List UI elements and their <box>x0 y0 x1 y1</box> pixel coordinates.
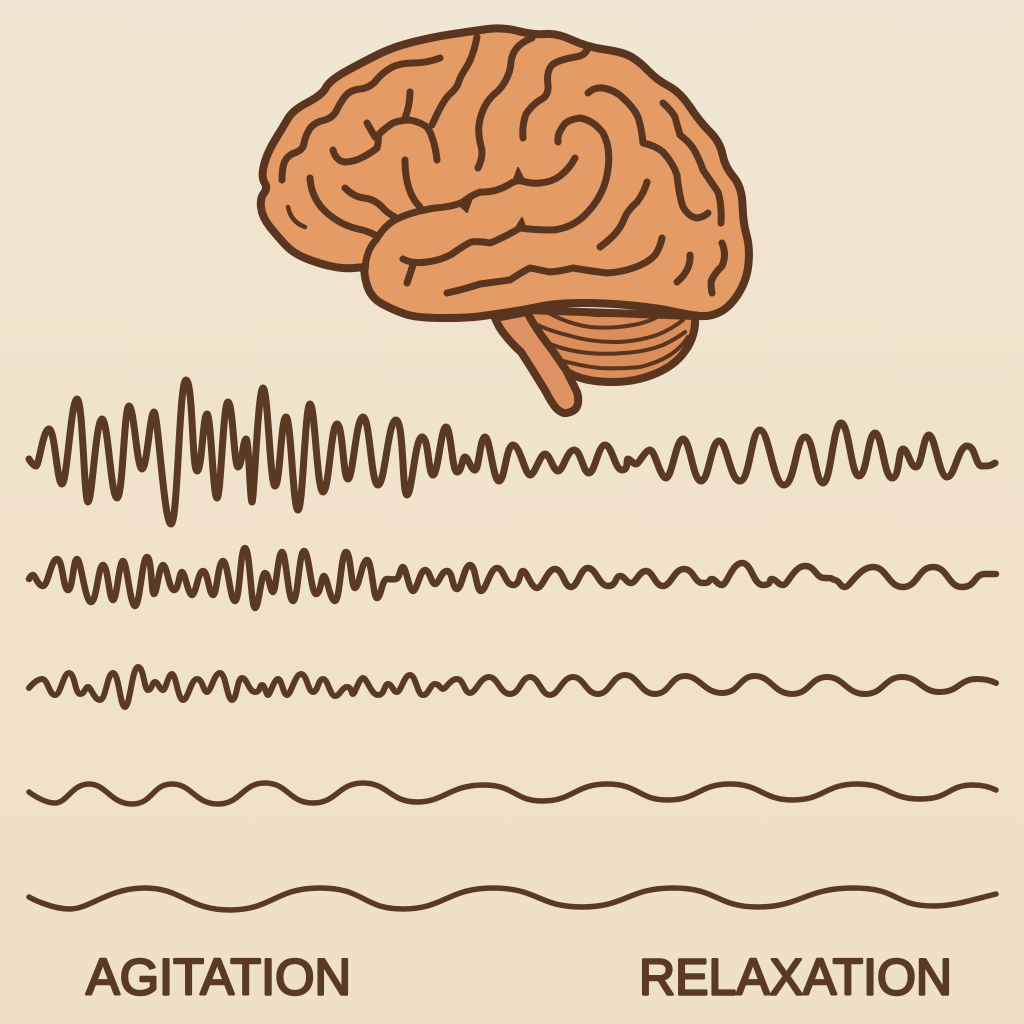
chart: five brain wave traces <box>29 380 996 910</box>
cerebellum <box>527 310 695 382</box>
wave 1: high-amplitude agitated trace <box>29 380 995 524</box>
cerebrum outline <box>261 28 749 318</box>
wave 2: medium-amplitude trace <box>29 548 996 608</box>
cerebrum folds <box>282 37 724 293</box>
brainstem <box>495 312 578 413</box>
wave 5: slow relaxed trace <box>29 888 996 910</box>
label: agitation: AGITATION <box>86 948 351 1006</box>
wave 3: low-amplitude trace <box>29 667 996 707</box>
wave 4: gentle trace <box>29 783 996 804</box>
icon: brain illustration <box>261 28 749 413</box>
axis labels <box>86 948 952 1006</box>
label: relaxation: RELAXATION <box>639 948 952 1006</box>
